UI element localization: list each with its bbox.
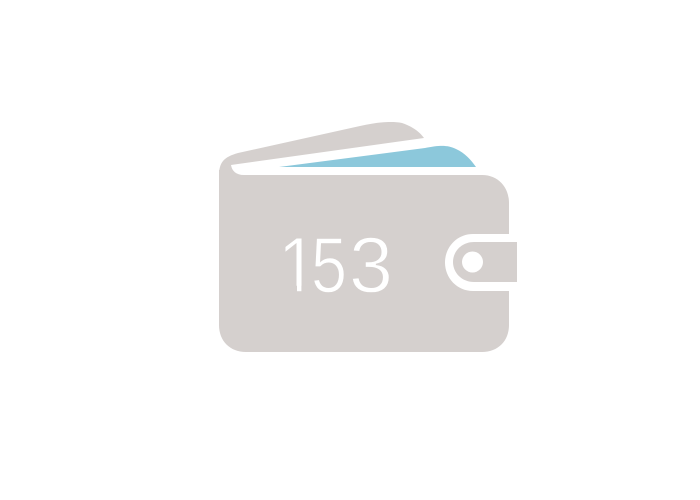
number 153: 3: [349, 220, 393, 309]
clasp tab: [453, 242, 517, 282]
number 153: [278, 220, 393, 309]
clasp button: [462, 252, 483, 272]
clasp cut-out: [445, 234, 518, 291]
icon: wallet: [219, 122, 518, 352]
blue card inside wallet: [279, 146, 476, 167]
wallet back flap: [219, 122, 424, 190]
number 153: 5: [311, 222, 347, 309]
number 153: 1: [278, 221, 318, 309]
wallet body: [219, 165, 509, 352]
